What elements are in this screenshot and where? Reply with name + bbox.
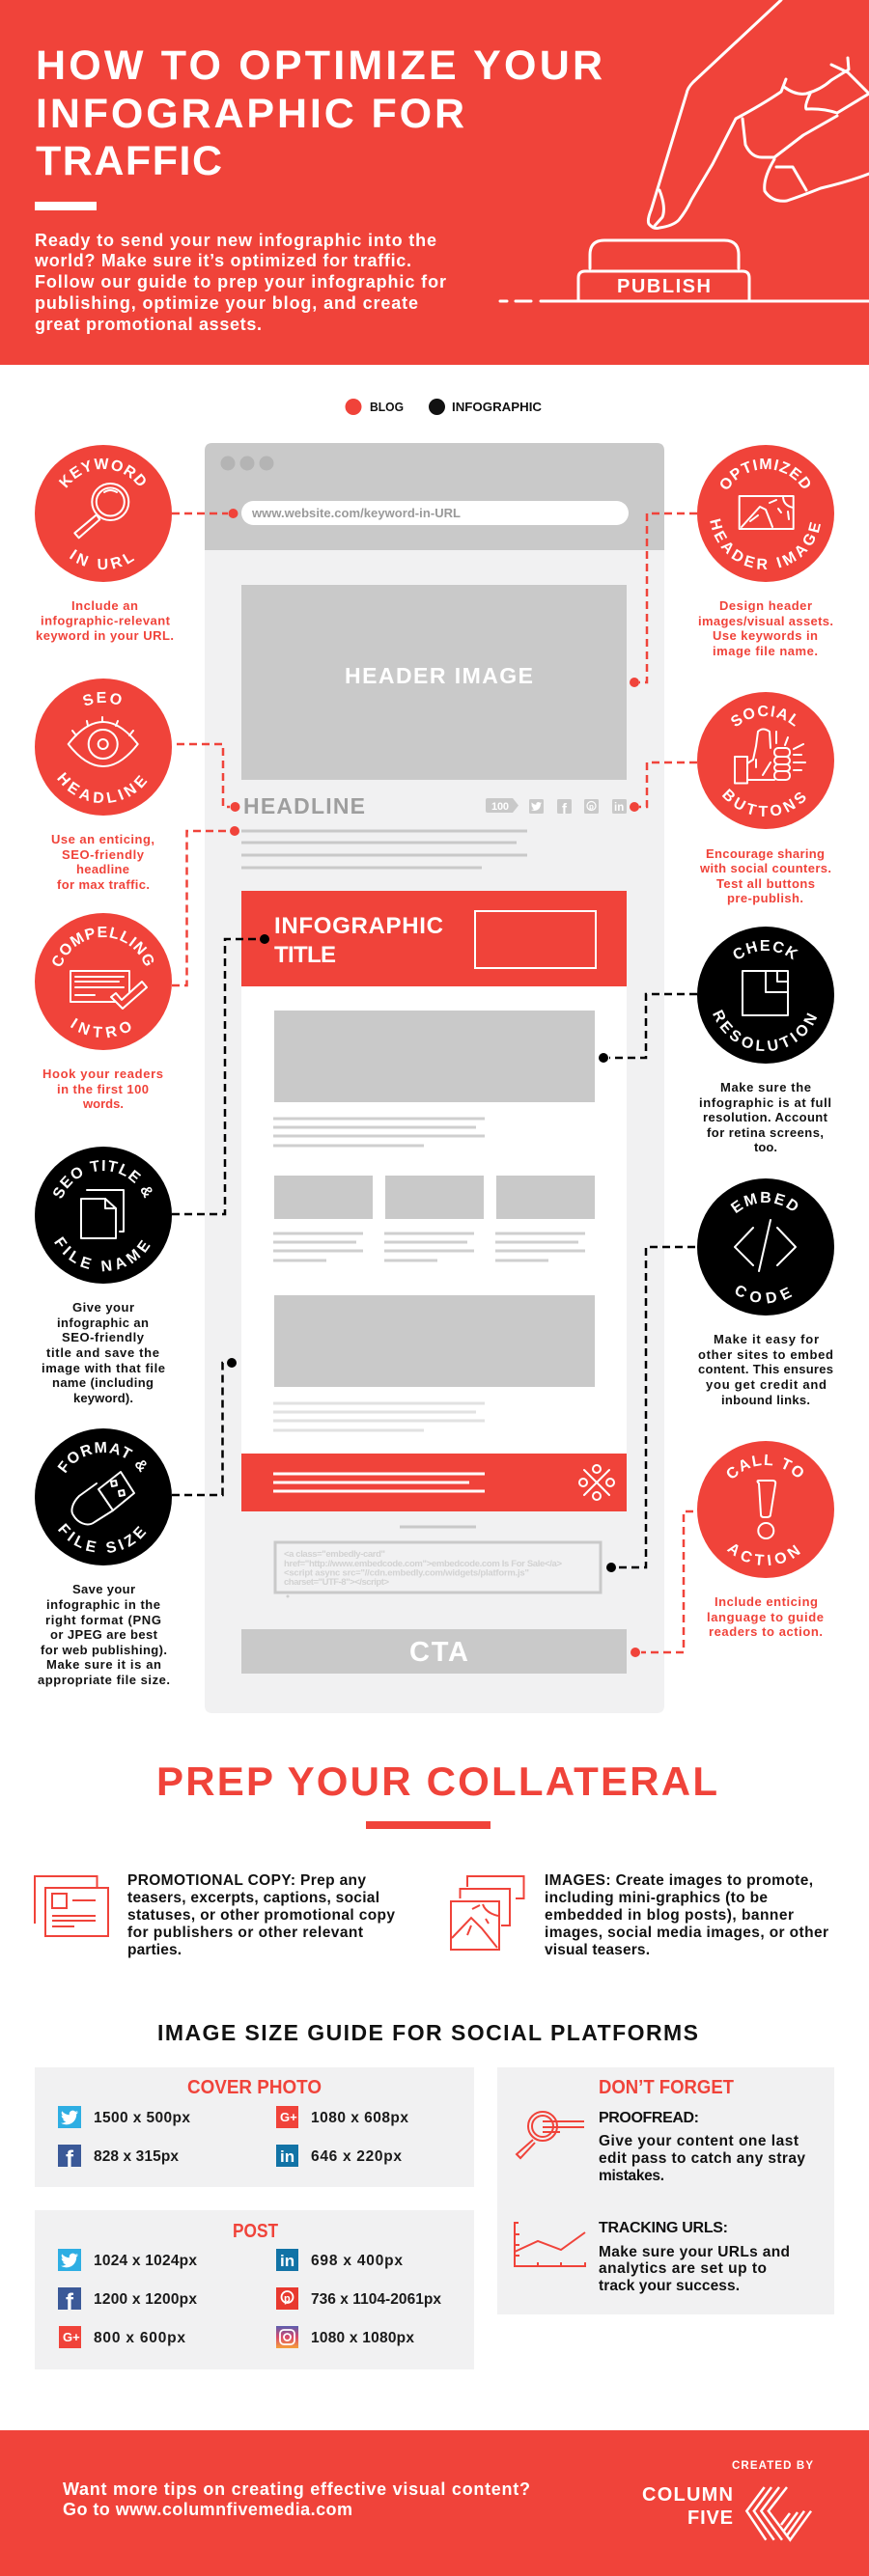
- text: promotional copy: PROMOTIONAL COPY: Prep any: [127, 1872, 366, 1889]
- text: images: including mini-graphics (to be: [545, 1890, 768, 1906]
- text: proofread: Give your content one last: [599, 2133, 799, 2149]
- badge: call to action: [697, 1441, 834, 1578]
- logo: column five: FIVE: [687, 2507, 733, 2529]
- caption: check resolution: resolution. Account: [703, 1110, 828, 1124]
- icon: linkedin: [276, 2249, 298, 2271]
- url bar: www.website.com/keyword-in-URL: [251, 506, 461, 520]
- intro paragraph: world? Make sure it’s optimized for traffic.: [34, 251, 411, 270]
- social counter and share icons: f: [562, 801, 568, 817]
- credit: CREATED BY: [732, 2460, 813, 2472]
- connector: seo title: [172, 934, 269, 1214]
- text: images: embedded in blog posts), banner: [545, 1907, 794, 1924]
- caption: call to action: Include enticing: [715, 1594, 818, 1609]
- badge: compelling intro: [35, 913, 172, 1050]
- badge: seo title and file name: SEO TITLE &: [53, 1160, 153, 1199]
- intro paragraph: great promotional assets.: [35, 315, 262, 334]
- caption: optimized header image: images/visual assets.: [698, 614, 833, 628]
- connector: seo headline: [177, 744, 239, 812]
- connector: format and file size: [172, 1358, 240, 1495]
- panel: post sizes: 800 x 600px: [94, 2330, 185, 2346]
- caption: social buttons: pre-publish.: [727, 891, 803, 905]
- caption: check resolution: too.: [754, 1140, 777, 1154]
- panel: cover photo sizes: 1500 x 500px: [94, 2110, 190, 2126]
- caption: compelling intro: in the first 100: [57, 1082, 149, 1096]
- icon: picture with mountain: [740, 496, 794, 529]
- icon: code brackets: [735, 1220, 796, 1271]
- icon: stacked copy pages: [35, 1876, 108, 1936]
- badge: call to action: CALL TO: [726, 1454, 803, 1479]
- caption: keyword in url: [36, 598, 174, 643]
- text: images: images, social media images, or other: [545, 1925, 828, 1941]
- badge: seo title and file name: [35, 1147, 172, 1284]
- panel: don't forget: TRACKING URLS:: [599, 2220, 728, 2236]
- text: proofread: mistakes.: [599, 2168, 664, 2184]
- footer banner: [0, 2430, 869, 2576]
- icon: document with check: [70, 971, 147, 1009]
- icon: hand pressing publish button: [500, 0, 869, 301]
- caption: keyword in url: keyword in your URL.: [36, 628, 174, 643]
- panel: post sizes: 736 x 1104-2061px: [311, 2291, 441, 2308]
- connector: keyword in url: [172, 509, 238, 518]
- caption: compelling intro: words.: [82, 1096, 124, 1111]
- badge: format and file size: [35, 1428, 172, 1565]
- badge: keyword in url: [35, 445, 172, 582]
- caption: call to action: readers to action.: [709, 1624, 823, 1639]
- caption: seo headline: [51, 832, 154, 892]
- social counter and share icons: [486, 798, 627, 817]
- infographic title band: [241, 891, 627, 986]
- badge: optimized header image: [697, 445, 834, 582]
- caption: seo title and file name: infographic an: [57, 1316, 149, 1330]
- caption: keyword in url: infographic-relevant: [41, 614, 171, 627]
- heading: image size guide: IMAGE SIZE GUIDE FOR SOCIAL PLATFORMS: [157, 2020, 698, 2045]
- intro paragraph: Follow our guide to prep your infographic for: [35, 272, 446, 291]
- icon: eye: [69, 717, 138, 766]
- text: tracking urls: [599, 2244, 790, 2294]
- panel: post sizes: [35, 2210, 474, 2369]
- panel: post sizes: 1024 x 1024px: [94, 2253, 197, 2269]
- icon: crossed logo: [579, 1465, 614, 1500]
- icon: facebook: f: [66, 2147, 74, 2173]
- icon: google plus: [276, 2106, 298, 2128]
- intro paragraph: Ready to send your new infographic into the: [35, 231, 436, 250]
- block: images: [451, 1872, 828, 1958]
- badge: seo headline: SEO: [83, 691, 122, 706]
- caption: format and file size: for web publishing).: [41, 1643, 167, 1657]
- caption: embed code: [698, 1332, 833, 1407]
- legend: INFOGRAPHIC: [452, 401, 542, 414]
- caption: format and file size: Save your: [72, 1582, 135, 1596]
- infographic footer band: [241, 1454, 627, 1511]
- caption: social buttons: with social counters.: [699, 861, 831, 875]
- blog headline: HEADLINE: [243, 793, 365, 818]
- panel: don't forget: [497, 2067, 834, 2314]
- caption: seo headline: headline: [76, 862, 129, 876]
- embed code box: [275, 1542, 601, 1598]
- badge: embed code: CODE: [736, 1286, 792, 1303]
- panel: cover photo sizes: 646 x 220px: [311, 2148, 402, 2165]
- panel: browser window mockup: [205, 443, 664, 1713]
- caption: seo title and file name: title and save the: [46, 1345, 159, 1360]
- badge: compelling intro: COMPELLING: [52, 927, 154, 966]
- blog intro lines: [241, 830, 527, 869]
- caption: call to action: language to guide: [707, 1610, 824, 1624]
- icon: google plus: G+: [63, 2330, 80, 2344]
- panel: post sizes: POST: [233, 2221, 278, 2242]
- legend: [346, 399, 542, 415]
- call to action bar: CTA: [409, 1637, 468, 1668]
- panel: don't forget: PROOFREAD:: [599, 2110, 699, 2126]
- caption: optimized header image: Design header: [719, 598, 812, 613]
- infographic column: [241, 891, 627, 1511]
- badge: optimized header image: HEADER IMAGE: [710, 518, 821, 569]
- content text lines: [273, 1118, 585, 1262]
- badge: seo headline: [35, 679, 172, 816]
- text: promotional copy: statuses, or other promotional copy: [127, 1907, 395, 1924]
- panel: cover photo sizes: [35, 2067, 474, 2187]
- caption: check resolution: for retina screens,: [707, 1125, 824, 1140]
- caption: format and file size: infographic in the: [46, 1597, 160, 1612]
- text: images: [545, 1872, 828, 1958]
- caption: format and file size: Make sure it is an: [46, 1657, 161, 1672]
- badge: call to action: ACTION: [726, 1544, 800, 1565]
- icon: google plus: [59, 2326, 81, 2348]
- icon: proofread magnifier: [517, 2112, 584, 2158]
- badge: seo headline: HEADLINE: [57, 772, 147, 803]
- caption: format and file size: [38, 1582, 170, 1687]
- caption: format and file size: right format (PNG: [45, 1613, 161, 1627]
- badge: keyword in url: KEYWORD: [58, 457, 146, 488]
- caption: seo title and file name: name (including: [52, 1375, 154, 1390]
- social counter and share icons: p: [589, 803, 594, 811]
- caption: compelling intro: [42, 1066, 163, 1111]
- heading: prep your collateral: [156, 1759, 717, 1829]
- content blocks: [274, 1011, 595, 1387]
- icon: linkedin: in: [280, 2147, 294, 2166]
- text: tracking urls: analytics are set up to: [599, 2260, 767, 2277]
- caption: embed code: content. This ensures: [698, 1362, 833, 1376]
- badge: check resolution: [697, 927, 834, 1064]
- caption: embed code: Make it easy for: [714, 1332, 819, 1346]
- icon: instagram: [276, 2326, 298, 2348]
- title: TRAFFIC: [36, 138, 222, 184]
- text: tracking urls: Make sure your URLs and: [599, 2244, 790, 2260]
- publish button label: PUBLISH: [617, 276, 711, 297]
- caption: keyword in url: Include an: [71, 598, 138, 613]
- header image placeholder: [241, 585, 627, 780]
- text: promotional copy: [127, 1872, 395, 1958]
- connector: social buttons: [630, 762, 697, 812]
- icon: pinterest: [276, 2287, 298, 2310]
- icon: usb drive: [71, 1472, 134, 1524]
- caption: optimized header image: [698, 598, 833, 658]
- panel: cover photo sizes: COVER PHOTO: [187, 2077, 322, 2098]
- title: HOW TO OPTIMIZE YOUR: [36, 42, 603, 89]
- icon: linkedin: [276, 2145, 298, 2167]
- social counter and share icons: 100: [491, 801, 509, 813]
- badge: optimized header image: OPTIMIZED: [720, 458, 811, 489]
- caption: social buttons: Encourage sharing: [706, 846, 825, 861]
- caption: format and file size: or JPEG are best: [50, 1627, 158, 1642]
- badge: format and file size: FILE SIZE: [58, 1523, 147, 1553]
- connector: compelling intro: [172, 826, 239, 985]
- icon: thumbs up: [735, 730, 805, 784]
- icon: twitter: [58, 2106, 81, 2128]
- panel: cover photo sizes: 828 x 315px: [94, 2148, 179, 2165]
- icon: stacked images: [451, 1876, 523, 1950]
- infographic title band: INFOGRAPHIC: [274, 913, 443, 939]
- header banner: [0, 0, 869, 365]
- caption: compelling intro: Hook your readers: [42, 1066, 163, 1081]
- caption: seo title and file name: [42, 1300, 165, 1405]
- badge: compelling intro: INTRO: [70, 1017, 131, 1039]
- caption: check resolution: infographic is at full: [699, 1095, 831, 1110]
- text: tracking urls: track your success.: [599, 2278, 740, 2294]
- icon: exclamation mark: [757, 1481, 775, 1538]
- text: promotional copy: parties.: [127, 1942, 182, 1958]
- caption: seo headline: for max traffic.: [57, 877, 150, 892]
- embed code box: <script async src="//cdn.embedly.com/widgets/platform.js": [284, 1567, 529, 1579]
- caption: optimized header image: Use keywords in: [713, 628, 818, 643]
- logo: column five: COLUMN: [642, 2484, 733, 2506]
- embed code box: charset="UTF-8"></script>: [284, 1577, 389, 1588]
- text: promotional copy: teasers, excerpts, captions, social: [127, 1890, 379, 1906]
- block: promotional copy: [35, 1872, 395, 1958]
- title: INFOGRAPHIC FOR: [36, 91, 464, 137]
- badge: embed code: EMBED: [730, 1191, 798, 1213]
- icon: facebook: [58, 2287, 81, 2315]
- logo: column five: [642, 2484, 811, 2540]
- badge: social buttons: BUTTONS: [722, 789, 805, 817]
- icon: facebook: f: [66, 2289, 74, 2315]
- badge: social buttons: SOCIAL: [731, 706, 796, 727]
- badge: check resolution: RESOLUTION: [713, 1010, 817, 1051]
- embed code box: href="http://www.embedcode.com">embedcode.com Is For Sale</a>: [284, 1559, 562, 1569]
- text: proofread: edit pass to catch any stray: [599, 2150, 805, 2167]
- connector: call to action: [631, 1511, 693, 1657]
- text: promotional copy: for publishers or other relevant: [127, 1925, 363, 1941]
- badge: keyword in url: IN URL: [70, 549, 135, 569]
- icon: stacked documents: [81, 1190, 124, 1238]
- icon: nested squares: [743, 971, 788, 1015]
- intro paragraph: [34, 231, 446, 334]
- caption: seo headline: SEO-friendly: [62, 847, 145, 862]
- panel: post sizes: 698 x 400px: [311, 2253, 403, 2269]
- badge: social buttons: [697, 692, 834, 829]
- caption: embed code: you get credit and: [706, 1377, 827, 1392]
- badge: format and file size: FORMAT &: [57, 1442, 147, 1473]
- caption: optimized header image: image file name.: [713, 644, 818, 658]
- caption: check resolution: Make sure the: [720, 1080, 811, 1094]
- caption: embed code: inbound links.: [721, 1393, 810, 1407]
- panel: don't forget: DON’T FORGET: [599, 2077, 734, 2098]
- social counter and share icons: in: [614, 802, 624, 814]
- caption: format and file size: appropriate file size.: [38, 1673, 170, 1687]
- icon: linkedin: in: [280, 2252, 294, 2270]
- call to action bar: [241, 1629, 627, 1674]
- badge: check resolution: CHECK: [734, 940, 799, 959]
- title: [36, 42, 603, 184]
- footer call to action text: Go to www.columnfivemedia.com: [63, 2500, 352, 2519]
- legend: BLOG: [370, 401, 404, 414]
- panel: post sizes: 1080 x 1080px: [311, 2330, 414, 2346]
- caption: seo title and file name: Give your: [72, 1300, 134, 1315]
- icon: google plus: G+: [280, 2110, 297, 2124]
- badge: embed code: [697, 1178, 834, 1316]
- url bar: [241, 501, 629, 525]
- caption: call to action: [707, 1594, 824, 1639]
- embed code box: <a class="embedly-card": [284, 1549, 385, 1560]
- connector: check resolution: [599, 994, 697, 1063]
- text: images: IMAGES: Create images to promote,: [545, 1872, 813, 1889]
- window dots: [220, 456, 274, 471]
- heading: prep your collateral: PREP YOUR COLLATERAL: [156, 1759, 717, 1804]
- footer call to action text: Want more tips on creating effective visual content?: [63, 2479, 530, 2499]
- connector: optimized header image: [630, 513, 697, 687]
- badge: seo title and file name: FILE NAME: [54, 1236, 151, 1272]
- icon: pinterest: p: [284, 2293, 291, 2305]
- text: proofread: [599, 2133, 805, 2184]
- icon: facebook: [58, 2145, 81, 2173]
- icon: tracking chart: [515, 2223, 585, 2266]
- infographic title band: TITLE: [274, 942, 336, 968]
- browser toolbar: [205, 443, 664, 550]
- caption: seo title and file name: keyword).: [73, 1391, 133, 1405]
- caption: embed code: other sites to embed: [698, 1347, 833, 1362]
- intro paragraph: publishing, optimize your blog, and create: [35, 293, 418, 313]
- panel: post sizes: 1200 x 1200px: [94, 2291, 197, 2308]
- caption: seo title and file name: image with that file: [42, 1361, 165, 1375]
- panel: cover photo sizes: 1080 x 608px: [311, 2110, 408, 2126]
- icon: twitter: [58, 2249, 81, 2271]
- title underline bar: [35, 202, 97, 210]
- caption: social buttons: [699, 846, 831, 905]
- caption: social buttons: Test all buttons: [716, 876, 815, 891]
- caption: check resolution: [699, 1080, 831, 1154]
- caption: seo title and file name: SEO-friendly: [62, 1330, 145, 1344]
- caption: seo headline: Use an enticing,: [51, 832, 154, 846]
- footer call to action text: [63, 2479, 530, 2519]
- text: images: visual teasers.: [545, 1942, 650, 1958]
- icon: magnifier: [74, 484, 128, 538]
- header image placeholder: HEADER IMAGE: [345, 663, 533, 688]
- connector: embed code: [606, 1247, 695, 1572]
